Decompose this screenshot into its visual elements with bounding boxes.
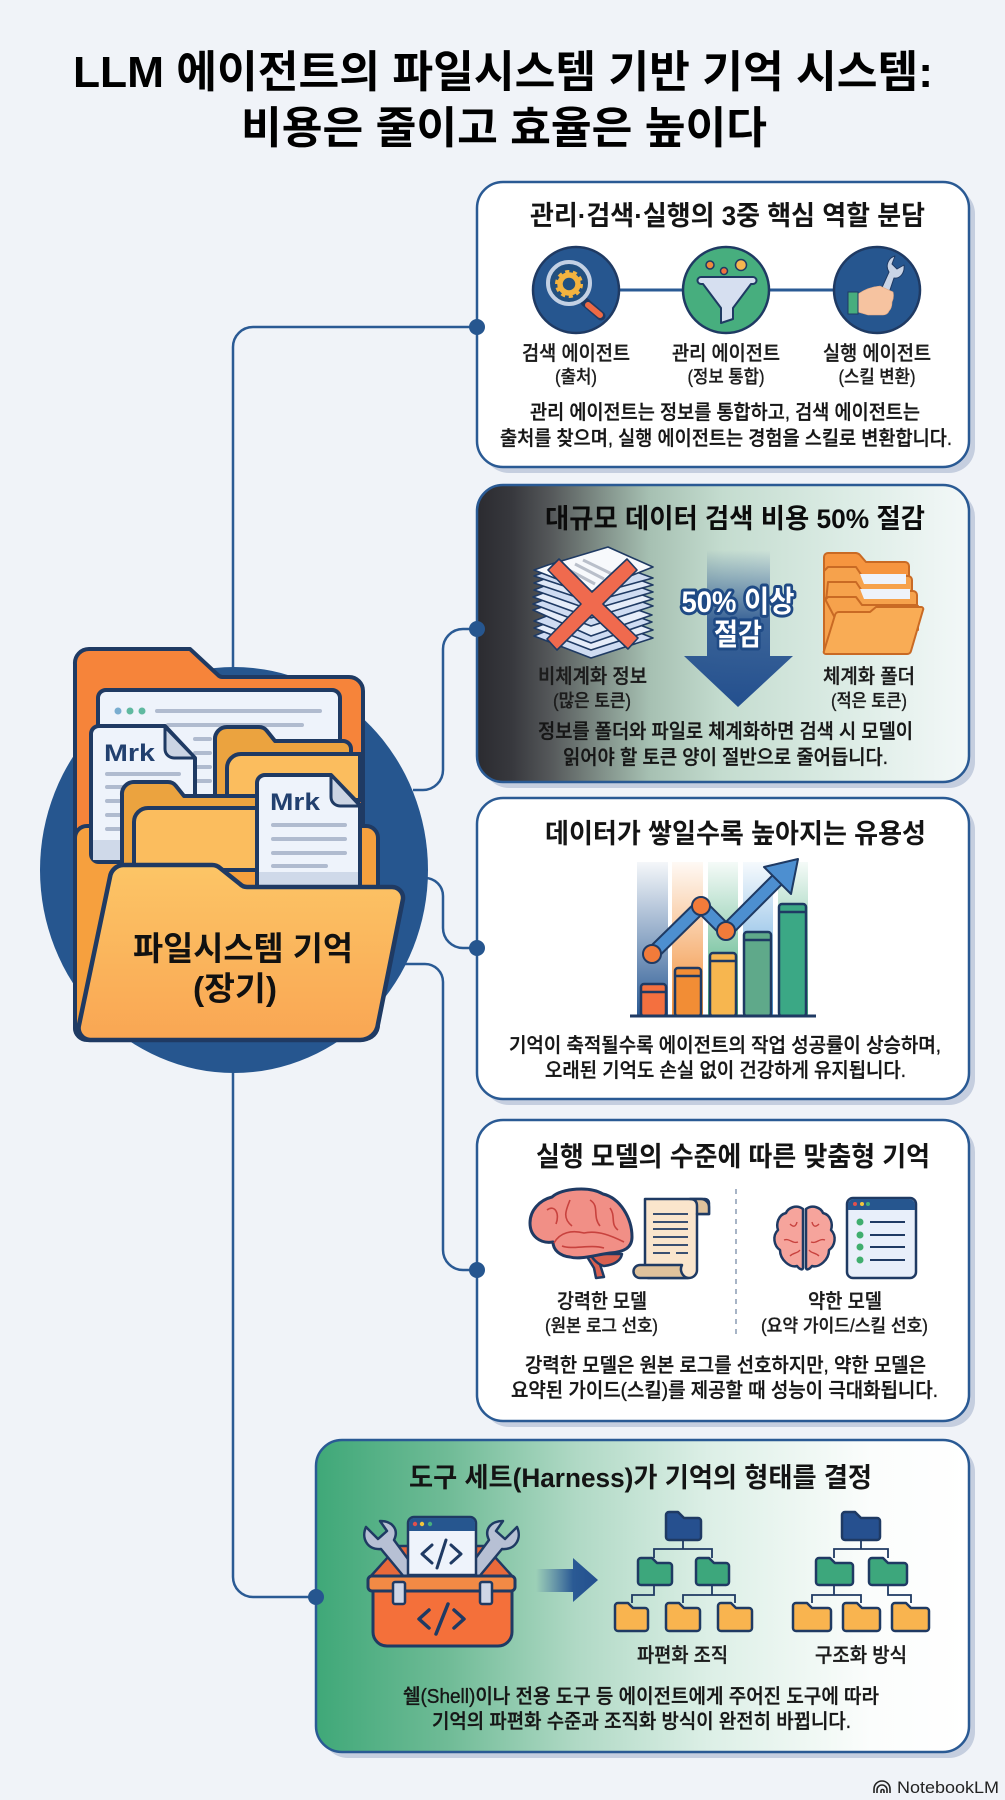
- connector node: [469, 1262, 485, 1278]
- back orange folder: [75, 649, 363, 1040]
- NotebookLM logo: NotebookLM: [897, 1778, 999, 1797]
- agent labels: 검색 에이전트: [522, 342, 630, 365]
- Mrk document left: [91, 726, 195, 862]
- Mrk document left: Mrk: [104, 740, 156, 767]
- heading: 관리·검색·실행의 3중 핵심 역할 분담: [530, 201, 925, 231]
- description: 강력한 모델은 원본 로그를 선호하지만, 약한 모델은: [525, 1354, 926, 1377]
- description: [403, 1685, 879, 1733]
- red cross: [547, 559, 638, 650]
- Mrk document right: Mrk: [270, 789, 321, 816]
- arrow to folder trees: [536, 1558, 598, 1602]
- left and right labels: 비체계화 정보: [538, 665, 647, 688]
- agent labels: 실행 에이전트: [823, 342, 931, 365]
- bar chart with rising arrow: [630, 859, 816, 1016]
- model labels: (원본 로그 선호): [545, 1316, 658, 1336]
- panel: customized memory by model level: [469, 1120, 975, 1427]
- model labels: 약한 모델: [808, 1290, 882, 1313]
- panel: search cost reduction: [469, 485, 975, 788]
- description: 요약된 가이드(스킬)를 제공할 때 성능이 극대화됩니다.: [511, 1379, 938, 1402]
- down arrow: [684, 550, 793, 707]
- description: [511, 1354, 938, 1402]
- panel: role division: [0, 0, 975, 473]
- left and right labels: [538, 665, 915, 711]
- blue circle backdrop: [40, 667, 428, 1073]
- front folder with label: [79, 865, 403, 1040]
- icon: small brain: [774, 1207, 835, 1269]
- left and right labels: (적은 토큰): [831, 691, 907, 711]
- icon: organized folders: [824, 553, 923, 654]
- description: 기억의 파편화 수준과 조직화 방식이 완전히 바뀝니다.: [432, 1710, 851, 1733]
- panel: harness shapes memory: [308, 1440, 975, 1758]
- icon: toolbox: [364, 1517, 519, 1646]
- model labels: [545, 1290, 928, 1336]
- browser document sheet: [98, 690, 340, 890]
- left and right labels: (많은 토큰): [553, 691, 631, 711]
- card frame: [477, 1120, 975, 1427]
- model labels: (요약 가이드/스킬 선호): [761, 1316, 928, 1336]
- left and right labels: 체계화 폴더: [823, 665, 915, 688]
- description: 정보를 폴더와 파일로 체계화하면 검색 시 모델이: [538, 720, 913, 743]
- icon: crossed out paper stack: [533, 547, 653, 658]
- lower back folder body: [75, 826, 378, 1039]
- description: [500, 401, 952, 450]
- central illustration: filesystem memory folder: [40, 649, 428, 1073]
- description: 쉘(Shell)이나 전용 도구 등 에이전트에게 주어진 도구에 따라: [403, 1685, 879, 1708]
- panel: utility grows with data: [469, 798, 975, 1105]
- icon: large brain: [530, 1189, 632, 1278]
- arrow label: 절감: [714, 619, 762, 652]
- agent labels: (출처): [555, 367, 597, 387]
- icon: scroll log: [634, 1199, 709, 1278]
- title: 비용은 줄이고 효율은 높이다: [241, 104, 767, 153]
- icon: search agent: [533, 247, 619, 333]
- description: 오래된 기억도 손실 없이 건강하게 유지됩니다.: [545, 1059, 906, 1082]
- agent labels: 관리 에이전트: [672, 342, 780, 365]
- stacked folder, centre: [122, 782, 262, 870]
- connector lines: [233, 327, 477, 1597]
- agent labels: (정보 통합): [688, 367, 764, 387]
- card frame: [477, 798, 975, 1105]
- tree labels: 구조화 방식: [815, 1644, 907, 1667]
- front folder with label: 파일시스템 기억: [133, 930, 353, 967]
- description: 출처를 찾으며, 실행 에이전트는 경험을 스킬로 변환합니다.: [500, 427, 952, 450]
- folder tree: structured method: [793, 1512, 929, 1631]
- arrow label: [682, 586, 794, 652]
- heading: 실행 모델의 수준에 따른 맞춤형 기억: [536, 1142, 930, 1172]
- link between icons: [576, 288, 877, 292]
- icon: execution agent hand: [0, 0, 920, 333]
- heading: 대규모 데이터 검색 비용 50% 절감: [545, 504, 925, 534]
- model labels: 강력한 모델: [557, 1290, 647, 1313]
- connector node: [308, 1589, 324, 1605]
- connector node: [469, 940, 485, 956]
- tree labels: 파편화 조직: [637, 1644, 728, 1667]
- tree labels: [637, 1644, 907, 1667]
- description: 기억이 축적될수록 에이전트의 작업 성공률이 상승하며,: [509, 1034, 941, 1057]
- description: [538, 720, 913, 769]
- heading: 데이터가 쌓일수록 높아지는 유용성: [545, 819, 926, 849]
- Mrk document right: [257, 775, 360, 886]
- title: LLM 에이전트의 파일시스템 기반 기억 시스템:: [73, 48, 933, 97]
- card frame: [477, 485, 975, 788]
- stacked folder, right: [215, 727, 360, 800]
- arrow label: 50% 이상: [682, 586, 794, 619]
- dashed divider: [735, 1189, 737, 1334]
- agent labels: (스킬 변환): [838, 367, 916, 387]
- title: [73, 48, 933, 153]
- description: 읽어야 할 토큰 양이 절반으로 줄어듭니다.: [563, 746, 888, 769]
- card frame: [316, 1440, 975, 1758]
- connector node: [469, 319, 485, 335]
- icon: summary guide window: [847, 1198, 916, 1278]
- connector node: [469, 621, 485, 637]
- description: 관리 에이전트는 정보를 통합하고, 검색 에이전트는: [530, 401, 920, 424]
- icon: manage agent funnel: [683, 247, 769, 333]
- folder tree: fragmented organization: [615, 1512, 752, 1631]
- front folder with label: (장기): [193, 970, 277, 1007]
- card frame: [477, 182, 975, 473]
- agent labels: [522, 342, 931, 387]
- description: [509, 1034, 941, 1082]
- heading: 도구 세트(Harness)가 기억의 형태를 결정: [409, 1463, 872, 1493]
